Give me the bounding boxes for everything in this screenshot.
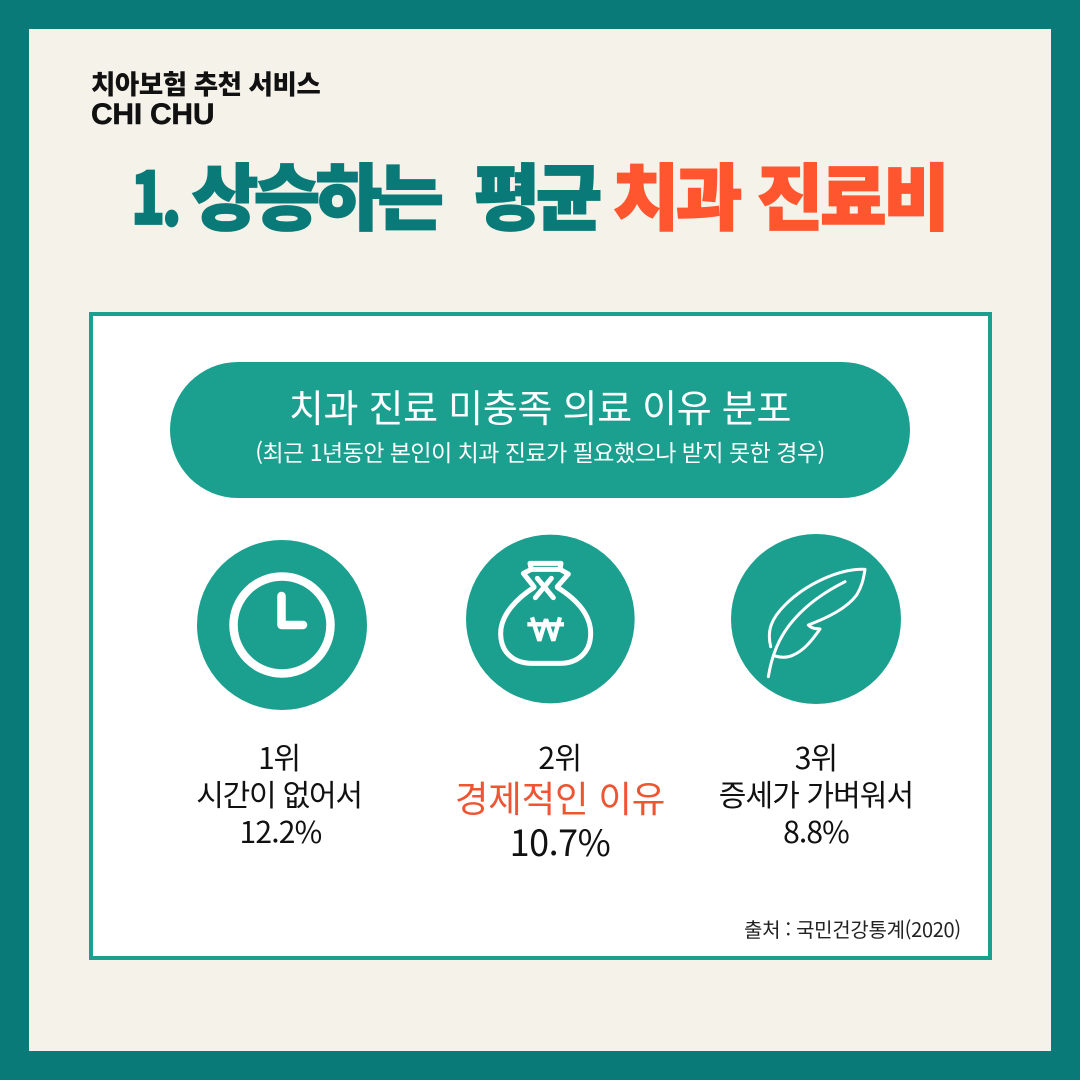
title: 치과 [613, 140, 739, 245]
title [131, 140, 947, 245]
icon: clock [197, 540, 367, 710]
stat: rank 3 [719, 734, 913, 852]
icon: money bag [466, 534, 635, 704]
pill subtitle: (최근 1년동안 본인이 치과 진료가 필요했으나 받지 못한 경우) [255, 434, 825, 468]
stat: rank 3: 3위 [795, 734, 837, 778]
stat: rank 2 [455, 734, 665, 867]
stat: rank 3: 증세가 가벼워서 [719, 771, 913, 815]
brand header: CHI CHU [91, 98, 214, 131]
stat: rank 2: 10.7% [510, 815, 610, 867]
brand header [91, 63, 320, 131]
stat: rank 1 [196, 734, 362, 852]
brand header: 치아보험 추천 서비스 [91, 63, 320, 102]
title: 진료비 [757, 140, 947, 245]
title: 평균 [474, 140, 598, 245]
stat: rank 3: 8.8% [783, 808, 849, 852]
pill heading [170, 362, 910, 498]
stat: rank 1: 12.2% [240, 808, 321, 852]
stat: rank 1: 1위 [258, 734, 300, 778]
pill title: 치과 진료 미충족 의료 이유 분포 [289, 378, 791, 433]
title: 상승하는 [192, 140, 439, 245]
white content panel [89, 312, 992, 960]
icon: feather [731, 534, 901, 704]
stat: rank 2: 2위 [538, 734, 582, 778]
source note: 출처 : 국민건강통계(2020) [744, 914, 961, 943]
stat: rank 1: 시간이 없어서 [196, 771, 362, 815]
stat: rank 2: 경제적인 이유 [455, 770, 665, 823]
title: 1. [131, 140, 178, 245]
